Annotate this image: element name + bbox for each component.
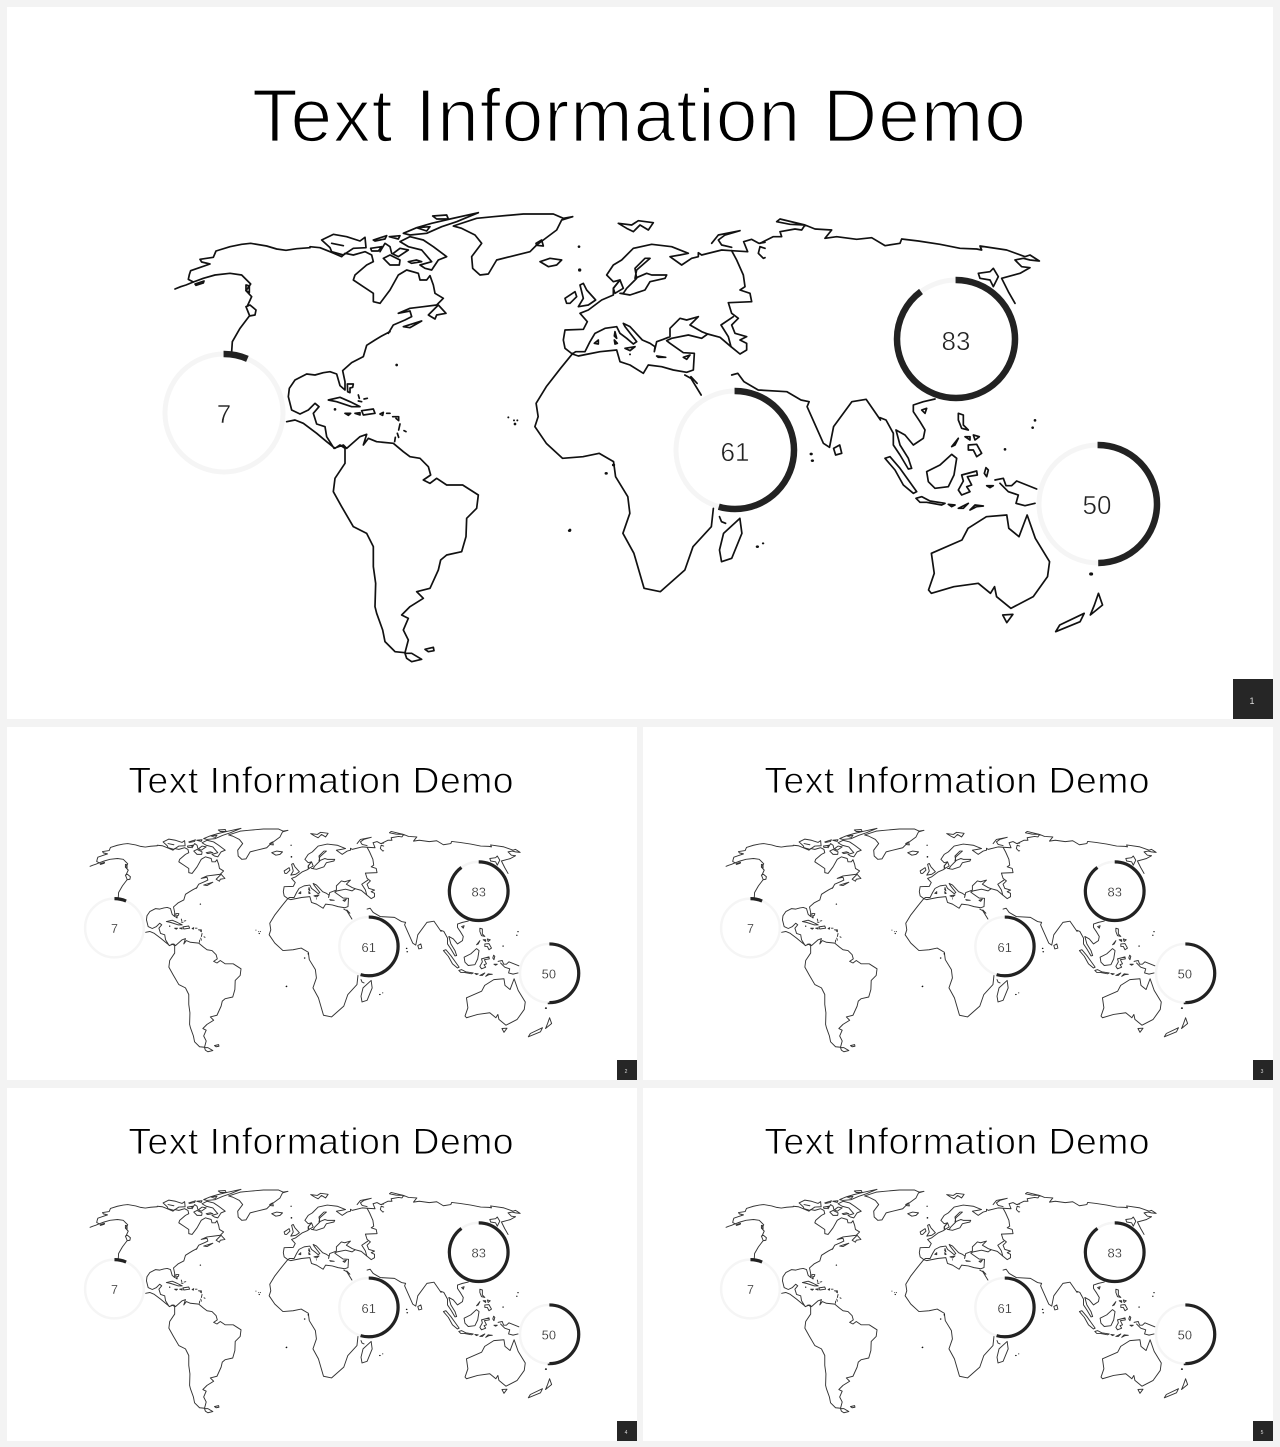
slide 2: thumbnail top left bbox=[7, 727, 637, 1080]
page badge: 1 bbox=[1249, 696, 1255, 706]
world map bbox=[175, 213, 1103, 662]
slide 3 content: 50 bbox=[1178, 966, 1192, 981]
slide 4 content: 50 bbox=[542, 1327, 556, 1342]
slide 3 content: Text Information Demo bbox=[764, 759, 1150, 801]
slide 5 content bbox=[721, 1120, 1215, 1413]
slide 5: thumbnail bottom right bbox=[643, 1088, 1273, 1441]
slide 2 badge: 2 bbox=[625, 1069, 628, 1075]
title: Text Information Demo bbox=[252, 74, 1026, 158]
slide 5 content: 61 bbox=[998, 1301, 1012, 1316]
slide 2 content bbox=[85, 759, 579, 1052]
ring: 7 percent bbox=[165, 354, 283, 472]
ring: 50 percent: 50 bbox=[1083, 490, 1111, 520]
ring: 61 percent bbox=[676, 391, 794, 509]
slide 4 content bbox=[85, 1120, 579, 1413]
slide 3: thumbnail top right bbox=[643, 727, 1273, 1080]
slide 4: thumbnail bottom left bbox=[7, 1088, 637, 1441]
slide 5 content: Text Information Demo bbox=[764, 1120, 1150, 1162]
slide 3 content: 83 bbox=[1108, 885, 1122, 900]
slide 2 content: Text Information Demo bbox=[128, 759, 514, 801]
ring: 83 percent: 83 bbox=[942, 326, 970, 356]
slide 3 badge: 3 bbox=[1261, 1069, 1264, 1075]
slide 2 content: 50 bbox=[542, 966, 556, 981]
slide 4 content: 7 bbox=[111, 1282, 118, 1297]
page badge bbox=[1233, 679, 1273, 719]
ring: 7 percent: 7 bbox=[217, 399, 231, 429]
slide 2 badge bbox=[617, 1060, 637, 1080]
slide 5 content: 50 bbox=[1178, 1327, 1192, 1342]
slide 5 content: 7 bbox=[747, 1282, 754, 1297]
slide 4 content: 83 bbox=[472, 1246, 486, 1261]
slide 5 badge: 5 bbox=[1261, 1430, 1264, 1436]
slide 1: main panel bbox=[7, 7, 1273, 719]
slide 2 content: 7 bbox=[111, 921, 118, 936]
ring: 61 percent: 61 bbox=[721, 437, 749, 467]
slide 4 badge bbox=[617, 1421, 637, 1441]
slide 3 content: 61 bbox=[998, 940, 1012, 955]
ring: 50 percent bbox=[1039, 445, 1157, 563]
slide 4 content: 61 bbox=[362, 1301, 376, 1316]
slide 5 badge bbox=[1253, 1421, 1273, 1441]
slide 3 badge bbox=[1253, 1060, 1273, 1080]
slide 3 content bbox=[721, 759, 1215, 1052]
slide 2 content: 83 bbox=[472, 885, 486, 900]
ring: 83 percent bbox=[897, 280, 1015, 398]
slide 3 content: 7 bbox=[747, 921, 754, 936]
slide 5 content: 83 bbox=[1108, 1246, 1122, 1261]
slide 4 badge: 4 bbox=[625, 1430, 628, 1436]
slide 4 content: Text Information Demo bbox=[128, 1120, 514, 1162]
slide 2 content: 61 bbox=[362, 940, 376, 955]
